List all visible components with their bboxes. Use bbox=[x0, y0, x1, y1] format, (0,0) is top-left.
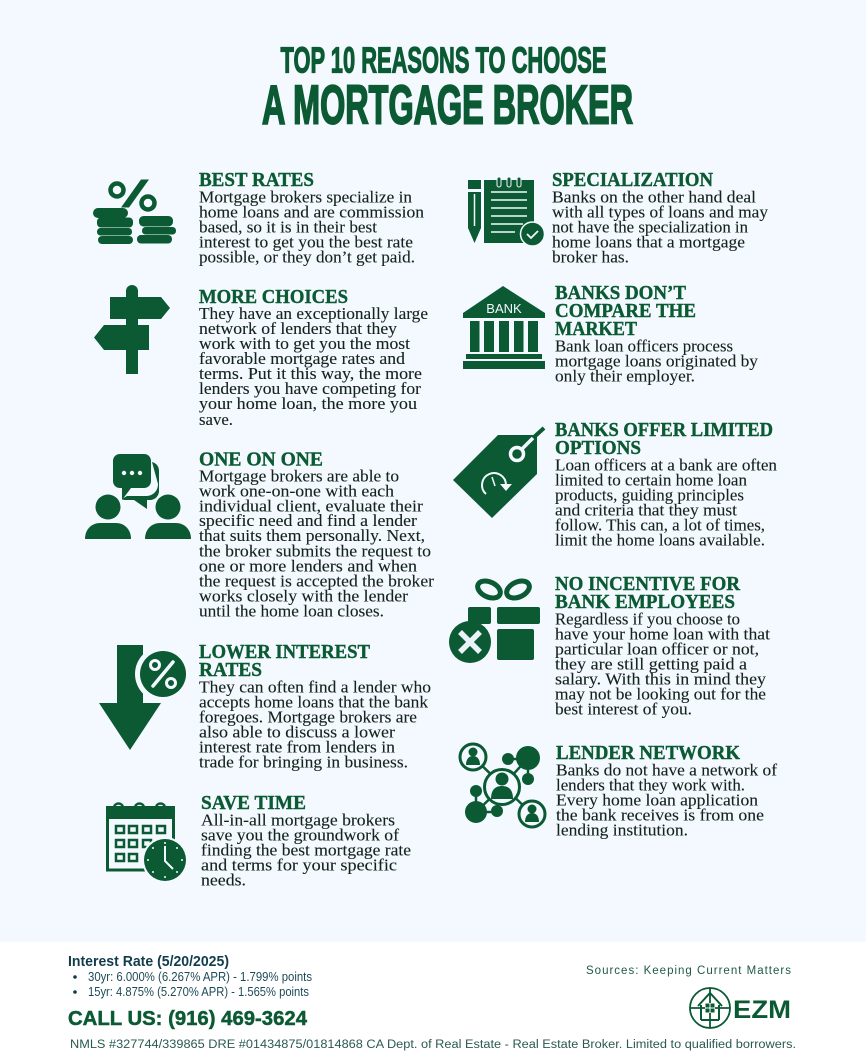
panel: best rates bbox=[93, 169, 425, 266]
text: specialization: with all types of loans and may bbox=[552, 202, 769, 222]
interest rate block bbox=[68, 954, 312, 999]
panel: more choices bbox=[94, 285, 428, 429]
icon: network of people bbox=[460, 744, 545, 827]
text: banks offer limited options: follow. This can, a lot of times, bbox=[555, 516, 765, 534]
logo: EZM bbox=[690, 988, 791, 1028]
heading: banks offer limited options: OPTIONS bbox=[555, 437, 641, 459]
text: save time: finding the best mortgage rate bbox=[201, 840, 411, 860]
panel: banks offer limited options bbox=[453, 419, 778, 550]
panel: banks don't compare the market bbox=[463, 282, 759, 386]
text: lender network: the bank receives is from one bbox=[556, 806, 764, 824]
heading: lender network: LENDER NETWORK bbox=[556, 742, 740, 764]
text: one on one: the broker submits the request to bbox=[199, 542, 431, 560]
text: no incentive for bank employees bbox=[555, 610, 770, 718]
heading: banks don't compare the market: BANKS DON’T bbox=[555, 282, 686, 304]
icon: percent and coins bbox=[93, 180, 176, 244]
heading: banks offer limited options: BANKS OFFER LIMITED bbox=[555, 419, 773, 441]
text: more choices: your home loan, the more you bbox=[199, 394, 418, 413]
text: banks offer limited options: and criteria that they must bbox=[555, 500, 737, 520]
text: save time: needs. bbox=[201, 870, 246, 890]
heading: no incentive for bank employees bbox=[555, 573, 740, 613]
text: banks offer limited options: limit the home loans available. bbox=[555, 530, 765, 550]
text: lender network: Banks do not have a network of bbox=[556, 760, 777, 780]
text: best rates: Mortgage brokers specialize in bbox=[199, 188, 413, 206]
heading: one on one: ONE ON ONE bbox=[199, 448, 323, 470]
heading: no incentive for bank employees: BANK EMPLOYEES bbox=[555, 591, 735, 613]
interest rate block: Interest Rate (5/20/2025) bbox=[68, 954, 229, 970]
text: one on one: until the home loan closes. bbox=[199, 602, 384, 620]
icon: calendar and clock bbox=[106, 804, 188, 883]
text: more choices: They have an exceptionally large bbox=[199, 304, 428, 323]
text: specialization: Banks on the other hand deal bbox=[552, 188, 756, 206]
text: one on one: Mortgage brokers are able to bbox=[199, 466, 399, 486]
text: specialization: not have the specialization in bbox=[552, 218, 749, 236]
icon: price tag with clock bbox=[453, 428, 544, 518]
text: best rates: based, so it is in their best bbox=[199, 218, 377, 236]
icon: notepad and pencil bbox=[468, 177, 544, 246]
text: lender network: lending institution. bbox=[556, 820, 688, 840]
title: TOP 10 REASONS TO CHOOSE bbox=[280, 40, 606, 80]
text: banks offer limited options: products, guiding principles bbox=[555, 486, 744, 504]
text: more choices bbox=[199, 304, 428, 429]
heading: no incentive for bank employees: NO INCENTIVE FOR bbox=[555, 573, 740, 595]
text: more choices: terms. Put it this way, the more bbox=[199, 364, 422, 383]
heading: specialization: SPECIALIZATION bbox=[552, 169, 713, 191]
heading: more choices: MORE CHOICES bbox=[199, 286, 348, 308]
text: best rates: possible, or they don’t get paid. bbox=[199, 248, 415, 266]
text: one on one: specific need and find a lender bbox=[199, 511, 417, 530]
call to action phone number: CALL US: (916) 469-3624 bbox=[68, 1007, 308, 1030]
text: no incentive for bank employees: Regardless if you choose to bbox=[555, 610, 740, 628]
text: one on one: one or more lenders and when bbox=[199, 556, 418, 576]
text: lower interest rates: trade for bringing in business. bbox=[199, 752, 408, 772]
heading: banks don't compare the market bbox=[555, 282, 696, 340]
text: lower interest rates: also able to discuss a lower bbox=[199, 722, 395, 742]
text: more choices: network of lenders that they bbox=[199, 319, 398, 338]
logo: EZM: EZM bbox=[733, 996, 791, 1024]
text: more choices: lenders you have competing for bbox=[199, 379, 421, 398]
text: no incentive for bank employees: they are still getting paid a bbox=[555, 654, 748, 674]
icon: gift box with cross bbox=[449, 578, 540, 663]
panel: no incentive for bank employees bbox=[449, 573, 770, 718]
text: best rates: home loans and are commission bbox=[199, 202, 425, 222]
text: no incentive for bank employees: salary. With this in mind they bbox=[555, 670, 767, 688]
text: lower interest rates: foregoes. Mortgage brokers are bbox=[199, 708, 417, 726]
icon: signpost bbox=[94, 285, 170, 374]
text: best rates: interest to get you the best rate bbox=[199, 232, 413, 252]
text: save time bbox=[201, 810, 411, 890]
text: save time: All-in-all mortgage brokers bbox=[201, 810, 395, 830]
licensing disclaimer: NMLS #327744/339865 DRE #01434875/01814868 CA Dept. of Real Estate - Real Estate Broker. Limited to qualified borrowers. bbox=[70, 1039, 796, 1051]
text: specialization: broker has. bbox=[552, 248, 629, 266]
text: one on one: that suits them personally. Next, bbox=[199, 526, 425, 545]
icon: down arrow with percent bbox=[99, 645, 191, 750]
text: lender network: Every home loan application bbox=[556, 790, 759, 810]
text: one on one: the request is accepted the broker bbox=[199, 572, 434, 590]
text: one on one: works closely with the lender bbox=[199, 586, 408, 606]
heading: save time: SAVE TIME bbox=[201, 792, 306, 814]
heading: banks offer limited options bbox=[555, 419, 773, 459]
interest rate block: 15yr: 4.875% (5.270% APR) - 1.565% points bbox=[88, 984, 309, 999]
text: best rates bbox=[199, 188, 425, 266]
text: lower interest rates: accepts home loans that the bank bbox=[199, 692, 429, 712]
text: save time: save you the groundwork of bbox=[201, 826, 399, 844]
text: more choices: favorable mortgage rates and bbox=[199, 349, 406, 368]
text: no incentive for bank employees: may not be looking out for the bbox=[555, 684, 766, 704]
panel: save time bbox=[106, 792, 411, 890]
text: save time: and terms for your specific bbox=[201, 856, 397, 874]
text: banks don't compare the market: mortgage loans originated by bbox=[555, 352, 759, 370]
icon: bank building: BANK bbox=[486, 301, 522, 316]
text: banks don't compare the market: Bank loan officers process bbox=[555, 336, 733, 356]
text: banks offer limited options: limited to certain home loan bbox=[555, 470, 748, 490]
panel: one on one bbox=[85, 448, 434, 620]
text: specialization: home loans that a mortgage bbox=[552, 232, 745, 252]
text: lower interest rates: interest rate from lenders in bbox=[199, 738, 396, 756]
panel: lender network bbox=[460, 742, 777, 840]
heading: lower interest rates: RATES bbox=[199, 659, 262, 681]
icon: bank building bbox=[463, 286, 545, 369]
text: one on one bbox=[199, 466, 434, 620]
text: no incentive for bank employees: have your home loan with that bbox=[555, 624, 770, 644]
text: more choices: save. bbox=[199, 410, 233, 429]
heading: banks don't compare the market: COMPARE THE bbox=[555, 300, 696, 322]
title bbox=[262, 40, 633, 136]
text: no incentive for bank employees: best interest of you. bbox=[555, 700, 692, 718]
heading: lower interest rates: LOWER INTEREST bbox=[199, 641, 370, 663]
heading: best rates: BEST RATES bbox=[199, 169, 314, 191]
text: banks offer limited options: Loan officers at a bank are often bbox=[555, 456, 778, 474]
text: lender network: lenders that they work with. bbox=[556, 776, 745, 794]
text: banks don't compare the market: only their employer. bbox=[555, 366, 695, 386]
panel: lower interest rates bbox=[99, 641, 431, 772]
text: banks don't compare the market bbox=[555, 336, 759, 386]
sources: Sources: Keeping Current Matters bbox=[586, 965, 791, 977]
text: lower interest rates: They can often find a lender who bbox=[199, 678, 431, 696]
interest rate block: 30yr: 6.000% (6.267% APR) - 1.799% points bbox=[88, 969, 312, 984]
heading: lower interest rates bbox=[199, 641, 370, 681]
heading: banks don't compare the market: MARKET bbox=[555, 318, 637, 340]
text: lender network bbox=[556, 760, 777, 840]
panel: specialization bbox=[468, 169, 769, 266]
text: one on one: work one-on-one with each bbox=[199, 482, 395, 500]
text: more choices: work with to get you the most bbox=[199, 334, 410, 353]
icon: two people talking bbox=[85, 454, 191, 539]
text: one on one: individual client, evaluate their bbox=[199, 496, 423, 516]
text: lower interest rates bbox=[199, 678, 431, 772]
text: specialization bbox=[552, 188, 769, 266]
footer panel bbox=[0, 942, 866, 1058]
text: banks offer limited options bbox=[555, 456, 778, 550]
text: no incentive for bank employees: particular loan officer or not, bbox=[555, 640, 759, 658]
